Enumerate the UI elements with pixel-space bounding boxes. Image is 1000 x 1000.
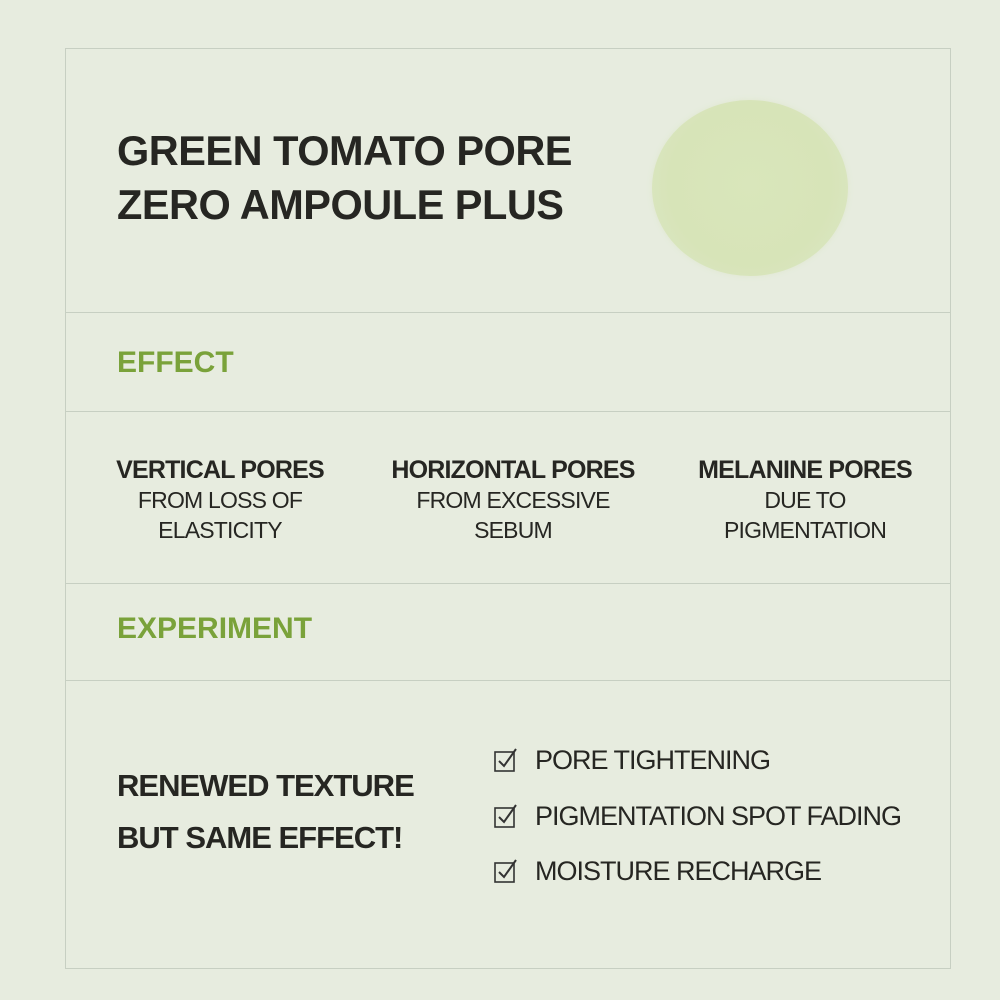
text: renewed texture: RENEWED TEXTURE [117, 768, 414, 803]
effect: vertical: FROM LOSS OF [138, 487, 302, 513]
text: renewed texture [117, 768, 414, 855]
effect: vertical: VERTICAL PORES [116, 456, 324, 484]
effect: melanine [698, 456, 912, 543]
title [117, 127, 572, 228]
effect: horizontal: FROM EXCESSIVE [416, 487, 610, 513]
effect: melanine: DUE TO [764, 487, 846, 513]
effect: horizontal [391, 456, 635, 543]
heading: effect: EFFECT [117, 346, 234, 379]
effect: horizontal: SEBUM [474, 517, 552, 543]
effect: vertical: ELASTICITY [158, 517, 282, 543]
text: renewed texture: BUT SAME EFFECT! [117, 820, 402, 855]
effect: melanine: PIGMENTATION [724, 517, 886, 543]
effect: melanine: MELANINE PORES [698, 456, 912, 484]
effect items [116, 456, 912, 543]
heading: experiment: EXPERIMENT [117, 612, 312, 645]
title: ZERO AMPOULE PLUS [117, 181, 563, 228]
item 1: PORE TIGHTENING [535, 744, 770, 774]
item 3: MOISTURE RECHARGE [535, 856, 821, 886]
checklist [494, 744, 901, 886]
effect: horizontal: HORIZONTAL PORES [391, 456, 635, 484]
title: GREEN TOMATO PORE [117, 127, 572, 174]
icon: ampoule drop [652, 100, 848, 276]
item 2: PIGMENTATION SPOT FADING [535, 800, 901, 830]
effect: vertical [116, 456, 324, 543]
